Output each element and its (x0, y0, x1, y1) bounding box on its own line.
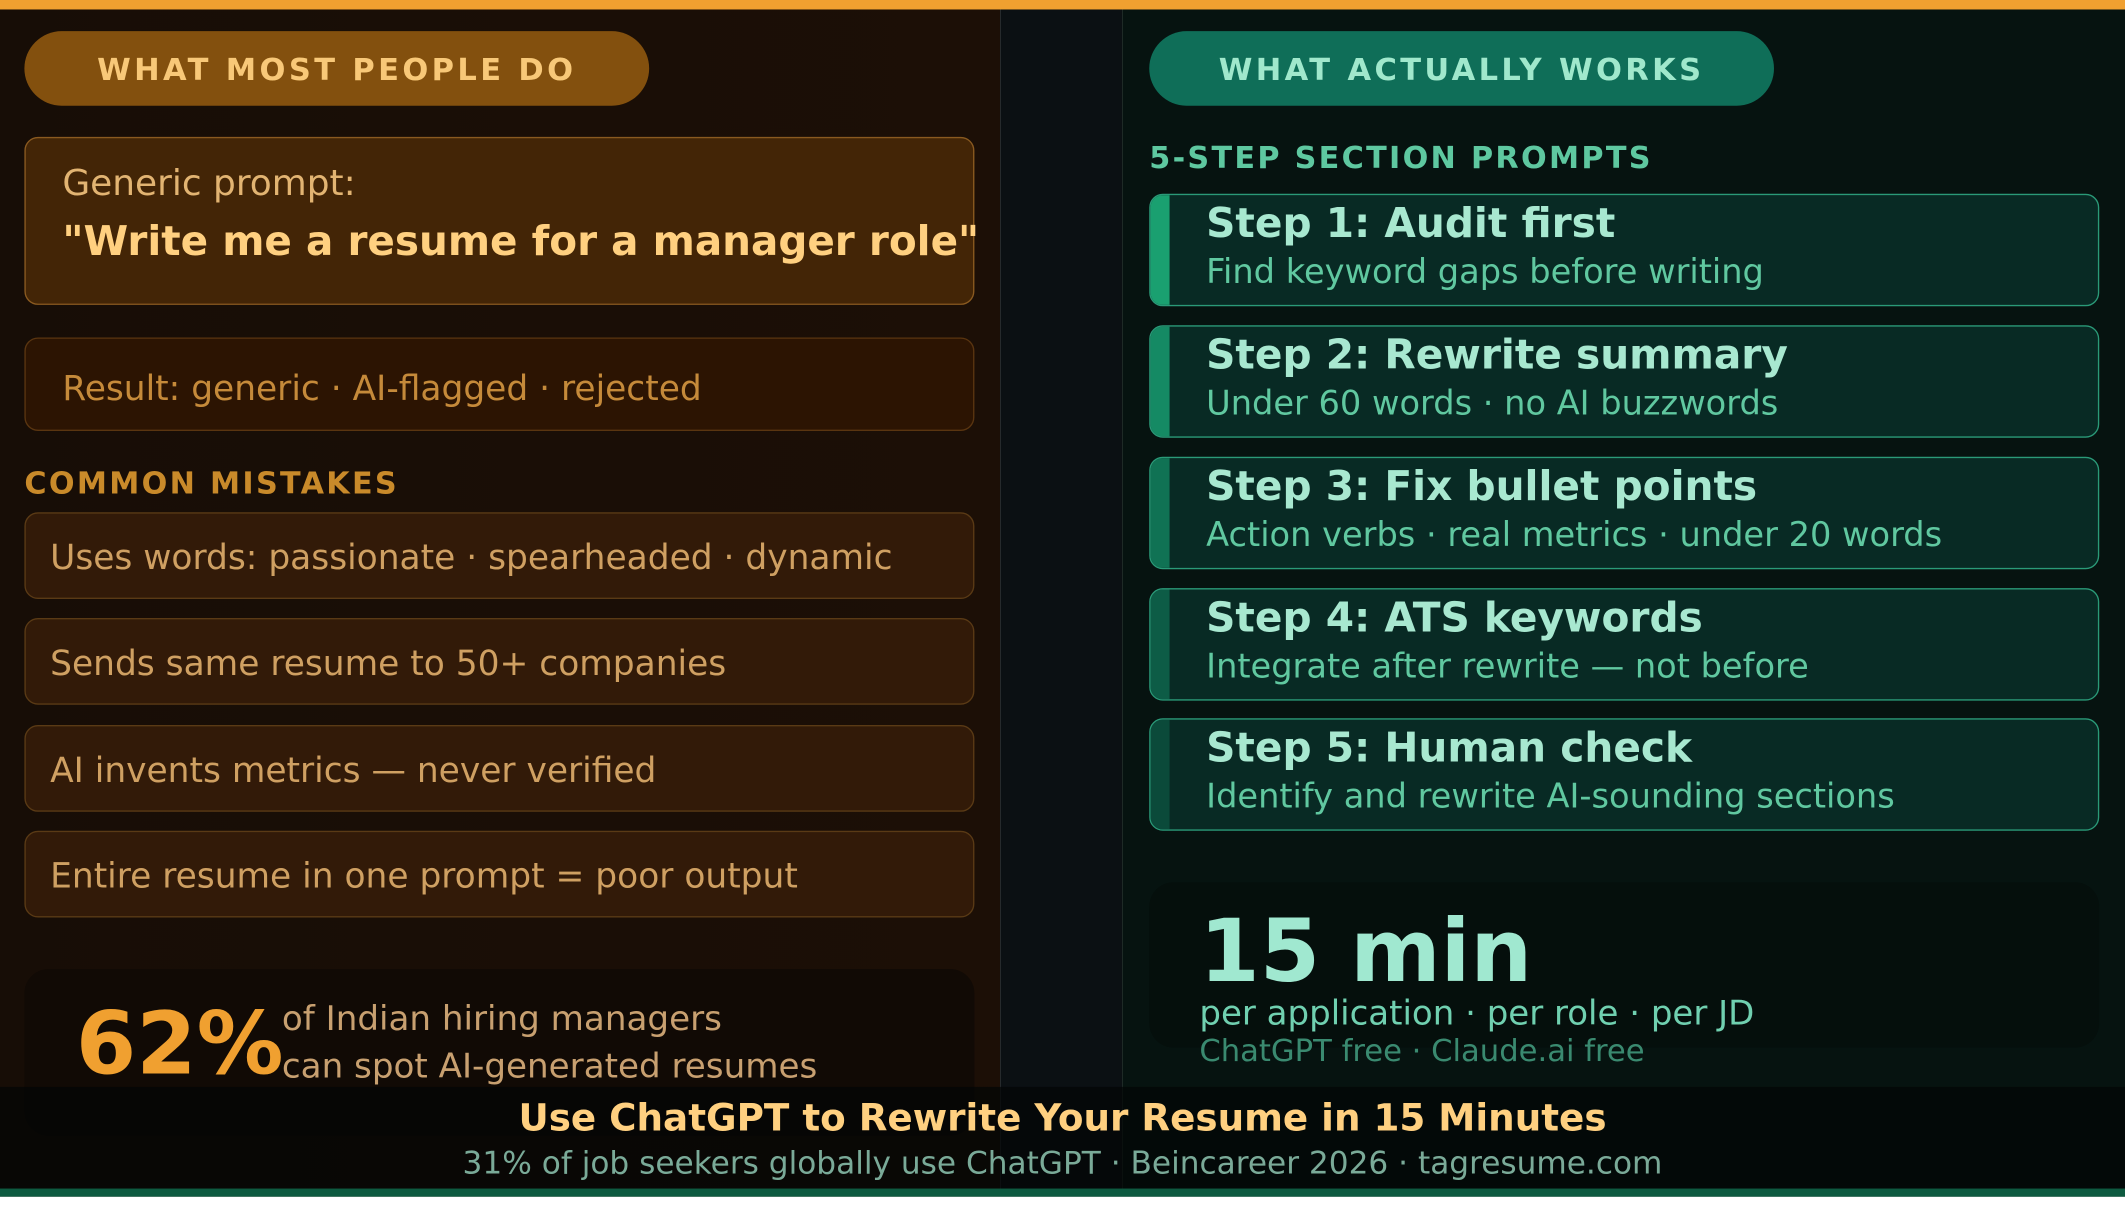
step 3: Action verbs · real metrics · under 20 words (1206, 515, 1942, 554)
mistake 1 (24, 512, 974, 599)
stat box: 62%: can spot AI-generated resumes (282, 1046, 817, 1086)
step 1 (1149, 194, 2099, 306)
step 2 (1149, 325, 2099, 438)
step 5: Identify and rewrite AI-sounding sections (1206, 777, 1895, 816)
mistake 3: AI invents metrics — never verified (50, 749, 656, 790)
generic prompt box: Generic prompt: (62, 163, 356, 205)
stat box: 15 min (1149, 882, 2099, 1048)
result box (24, 337, 974, 431)
right panel background (1122, 0, 2125, 1197)
step 1: Find keyword gaps before writing (1206, 252, 1764, 291)
step 5 (1149, 718, 2099, 831)
generic prompt box (24, 137, 974, 305)
step 4 (1149, 588, 2099, 701)
stat box: 62%: of Indian hiring managers (282, 999, 722, 1038)
left panel background (0, 0, 1000, 1197)
step 5: Step 5: Human check (1206, 725, 1692, 772)
stat box: 62% (24, 969, 974, 1136)
top accent bar (0, 0, 2125, 9)
step 3: Step 3: Fix bullet points (1206, 463, 1757, 511)
stat box: 62%: 62% (76, 995, 283, 1095)
stat box: 15 min: per application · per role · per JD (1199, 993, 1754, 1033)
step 1: Step 1: Audit first (1206, 201, 1615, 248)
pill: what actually works: WHAT ACTUALLY WORKS (1219, 53, 1705, 88)
footer band: 31% of job seekers globally use ChatGPT · Beincareer 2026 · tagresume.com (463, 1147, 1662, 1182)
pill: what most people do (24, 31, 649, 106)
heading: common mistakes: COMMON MISTAKES (24, 466, 399, 501)
middle gap (1000, 0, 1122, 1197)
mistake 4: Entire resume in one prompt = poor output (50, 855, 798, 896)
step 4: Integrate after rewrite — not before (1206, 646, 1809, 686)
stat box: 15 min: 15 min (1199, 903, 1532, 1003)
mistake 1: Uses words: passionate · spearheaded · dynamic (50, 537, 893, 577)
note: free tools: ChatGPT free · Claude.ai free (1199, 1034, 1645, 1069)
pill: what most people do: WHAT MOST PEOPLE DO (97, 53, 576, 88)
generic prompt box: "Write me a resume for a manager role" (62, 218, 979, 266)
step 4: Step 4: ATS keywords (1206, 595, 1703, 642)
pill: what actually works (1149, 31, 1774, 106)
step 2: Under 60 words · no AI buzzwords (1206, 384, 1778, 423)
heading: 5-step section prompts: 5-STEP SECTION PROMPTS (1149, 141, 1653, 176)
mistake 2 (24, 618, 974, 705)
mistake 2: Sends same resume to 50+ companies (50, 642, 726, 683)
footer band (0, 1087, 2125, 1189)
bottom accent bar (0, 1189, 2125, 1197)
step 3 (1149, 457, 2099, 569)
footer band: Use ChatGPT to Rewrite Your Resume in 15 Minutes (518, 1096, 1607, 1140)
result box: Result: generic · AI-flagged · rejected (62, 367, 702, 408)
mistake 4 (24, 831, 974, 917)
step 2: Step 2: Rewrite summary (1206, 332, 1788, 379)
mistake 3 (24, 725, 974, 812)
